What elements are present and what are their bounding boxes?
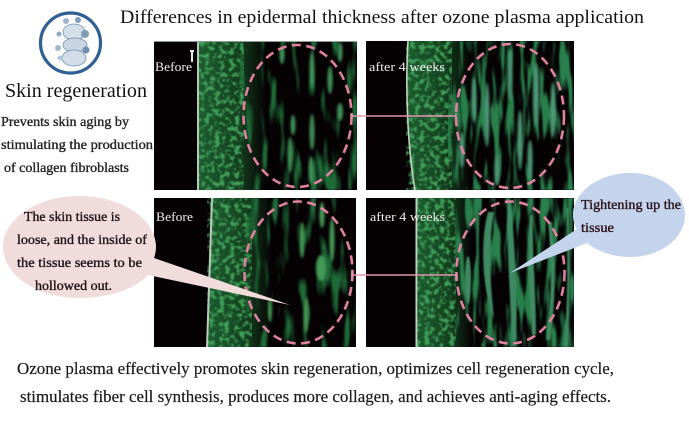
callout: tightening tissue: Tightening up the (581, 197, 681, 212)
text block: conclusion: Ozone plasma effectively promotes skin regeneration, optimizes cell regeneration cycle, (17, 359, 614, 378)
callout: loose tissue: hollowed out. (35, 278, 112, 293)
text block: skin aging description (1, 114, 153, 175)
panel: after 4 weeks, bottom (366, 198, 574, 347)
dashed circle: bottom before (244, 202, 352, 344)
text block: skin aging description: of collagen fibroblasts (4, 160, 129, 175)
label: after 4 weeks bottom: after 4 weeks (370, 209, 445, 224)
dashed circle: bottom after (456, 202, 564, 344)
callout: loose tissue: the tissue seems to be (17, 255, 142, 270)
dashed circle: top before (244, 45, 352, 187)
panel: after 4 weeks, top (366, 41, 574, 190)
label: before bottom: Before (156, 209, 193, 224)
label: after 4 weeks top: after 4 weeks (369, 59, 445, 74)
text block: skin aging description: Prevents skin aging by (1, 114, 129, 129)
callout: tightening tissue: tissue (581, 220, 614, 235)
label: before top: Before (155, 59, 192, 74)
dashed circle: top after (456, 44, 564, 188)
text block: skin aging description: stimulating the production (1, 137, 153, 152)
callout: loose tissue (3, 196, 290, 305)
arrow: bottom comparison (352, 272, 456, 278)
marker: small tick on first panel (190, 50, 194, 62)
callout: loose tissue: The skin tissue is (24, 209, 120, 224)
text block: conclusion: stimulates fiber cell synthesis, produces more collagen, and achieves anti-aging effects. (20, 387, 611, 406)
panel: before, bottom (154, 198, 356, 347)
callout: tightening tissue (510, 173, 685, 273)
heading: skin regeneration: Skin regeneration (5, 81, 147, 102)
panel: before, top (154, 41, 357, 190)
text block: conclusion (17, 359, 614, 406)
icon: skin cells logo (40, 13, 100, 73)
callout: loose tissue: loose, and the inside of (17, 232, 148, 247)
title: Differences in epidermal thickness after ozone plasma application (120, 8, 644, 28)
arrow: top comparison (352, 113, 456, 119)
